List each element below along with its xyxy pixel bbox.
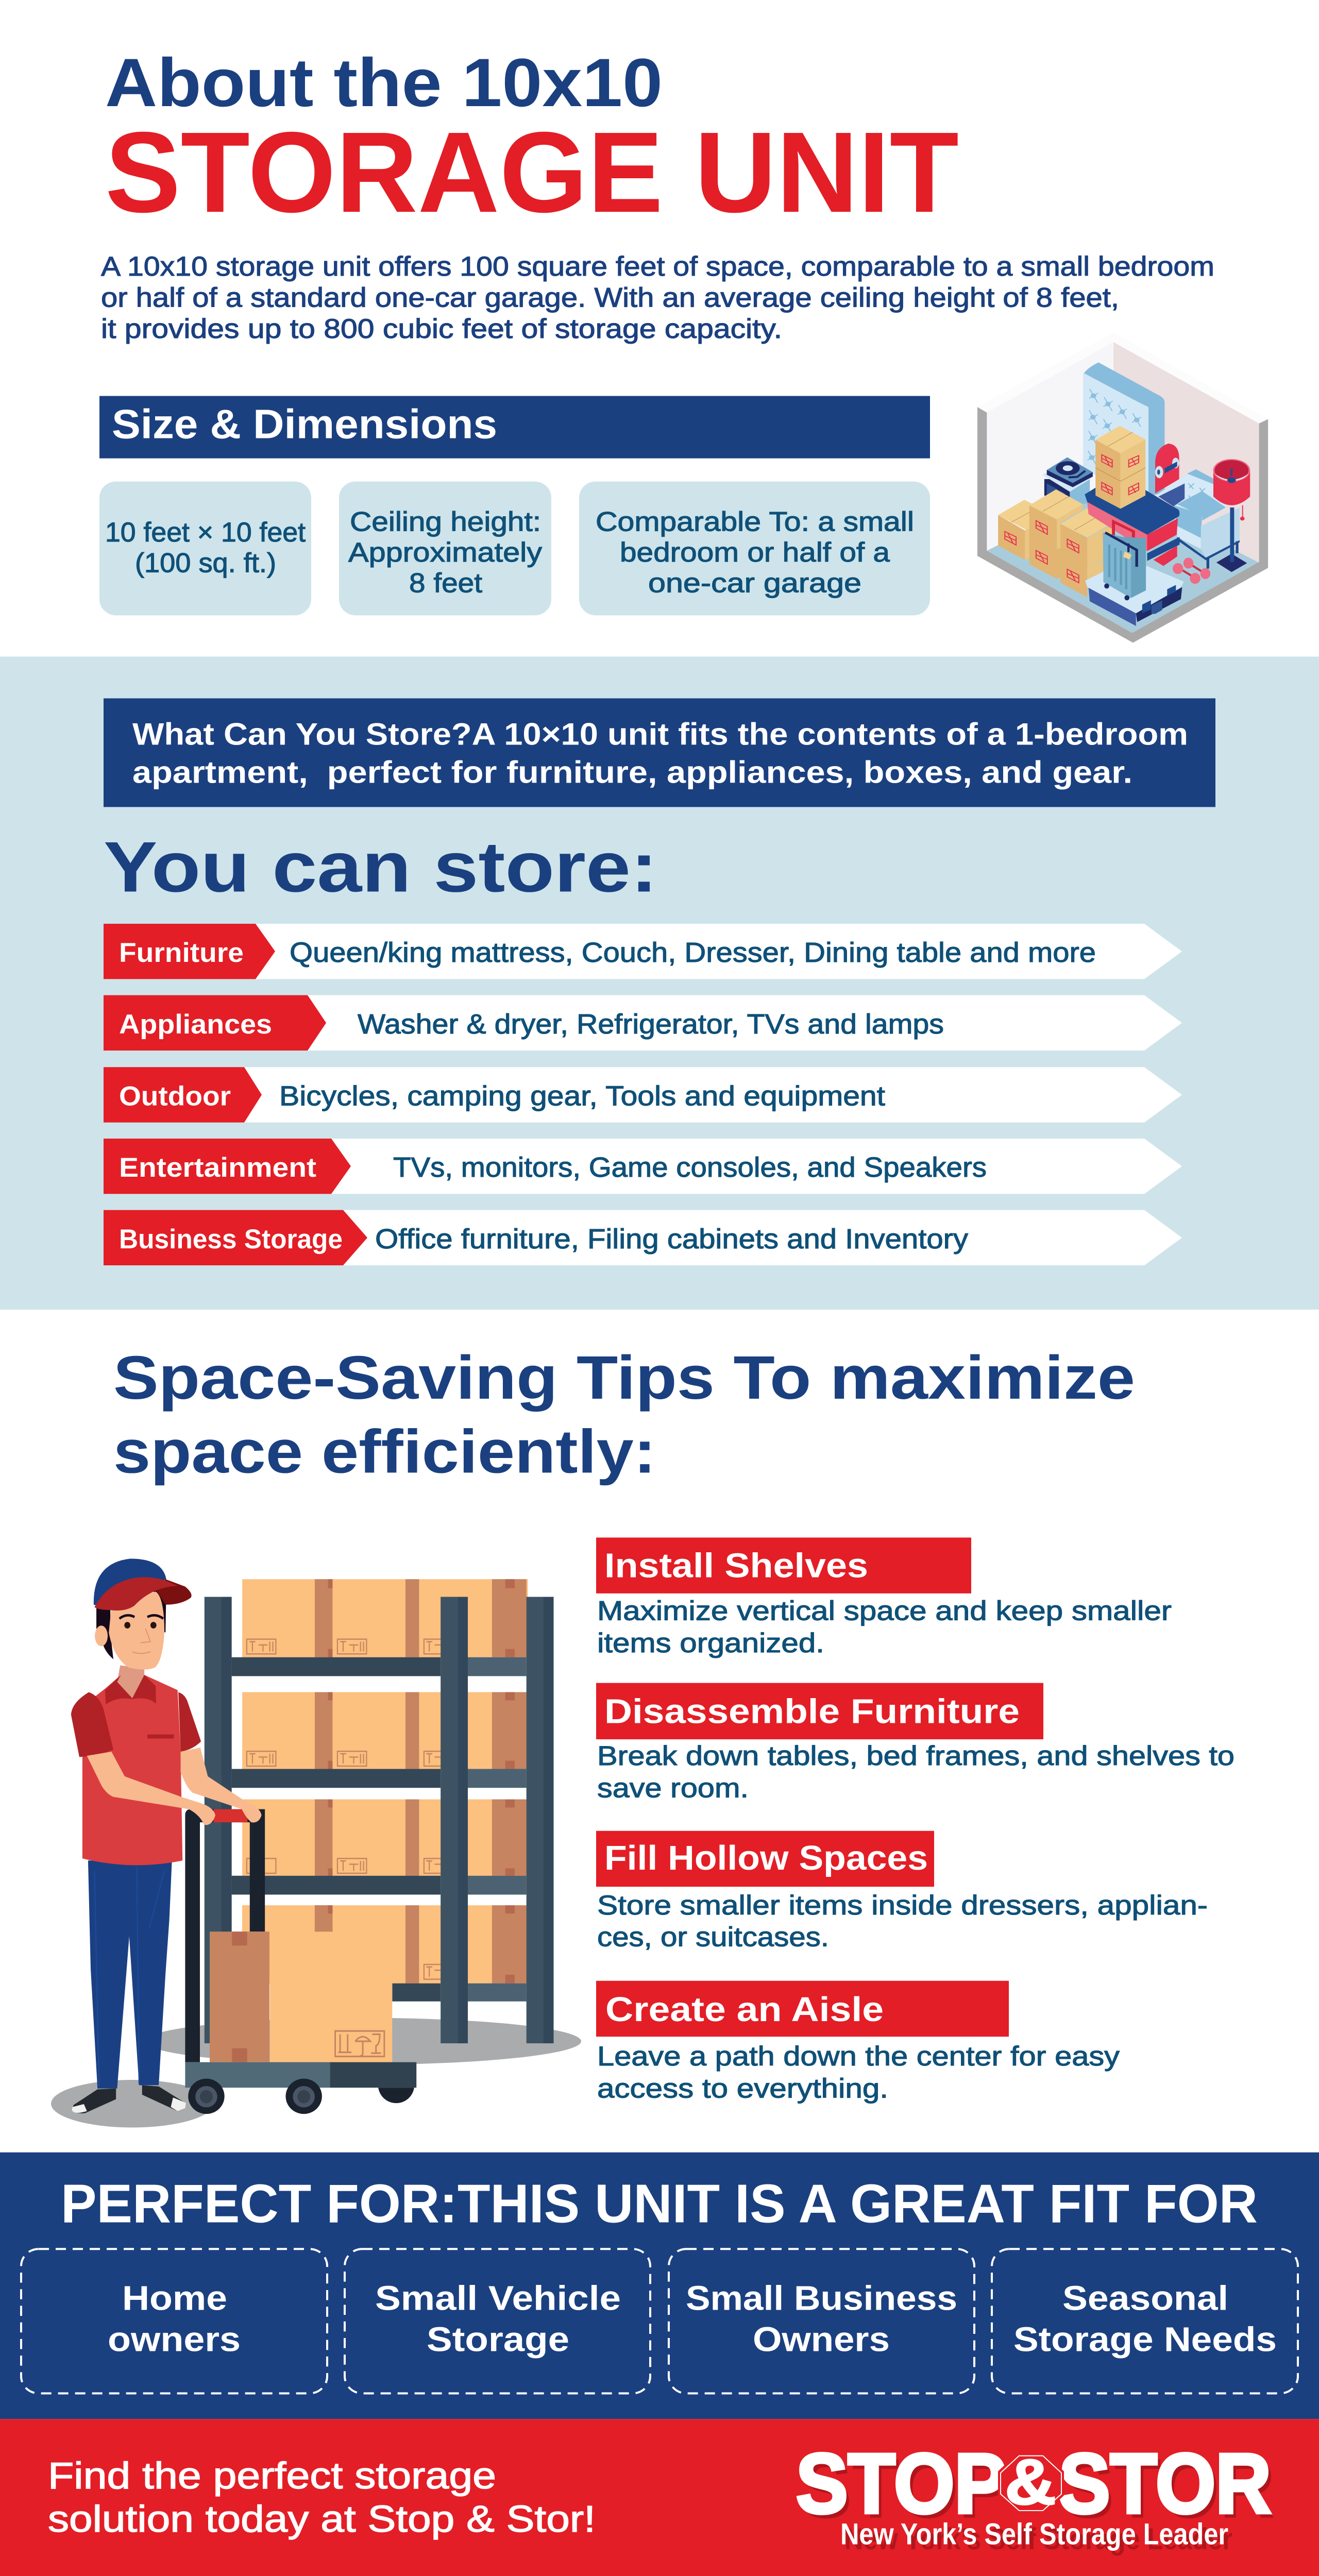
logo: stop and stor: STOP [800, 2442, 1010, 2536]
tip: disassemble furniture: Disassemble Furniture [604, 1692, 1020, 1731]
card: comparable to [579, 482, 930, 615]
card: ceiling height: Approximately [348, 537, 542, 568]
row: appliances: Appliances [119, 1009, 272, 1040]
tip: install shelves: Install Shelves [604, 1547, 868, 1585]
call to action: solution today at Stop & Stor! [48, 2499, 596, 2540]
title [105, 44, 959, 236]
row: business storage: Business Storage [119, 1224, 343, 1255]
panel: size and dimensions heading: Size & Dimensions [112, 401, 497, 447]
intro banner: what can you store: apartment, perfect for furniture, appliances, boxes, and gear. [132, 755, 1132, 789]
tip: disassemble furniture: Break down tables, bed frames, and shelves to [597, 1741, 1235, 1771]
logo: stop and stor: & [1005, 2446, 1056, 2518]
panel: size and dimensions heading [99, 396, 930, 459]
card: small vehicle storage: Storage [427, 2320, 569, 2359]
card: ceiling height [339, 482, 551, 615]
intro paragraph [101, 252, 1214, 344]
illustration: worker with cart and shelves [51, 1558, 581, 2128]
row: entertainment [104, 1139, 1182, 1194]
heading: you can store: You can store: [104, 827, 657, 907]
card: small vehicle storage: Small Vehicle [375, 2279, 621, 2317]
heading: space-saving tips [113, 1343, 1135, 1486]
card: comparable to: Comparable To: a small [596, 507, 914, 537]
card: ceiling height: 8 feet [409, 568, 482, 598]
stacked boxes on table [1095, 426, 1145, 509]
logo: stop and stor: STOR [1059, 2437, 1271, 2531]
card: seasonal storage needs [992, 2249, 1298, 2394]
card: home owners: Home [122, 2279, 227, 2317]
table with bins [1085, 488, 1180, 566]
card: floor size: 10 feet × 10 feet [105, 517, 306, 548]
call to action [48, 2455, 596, 2540]
illustration: isometric storage unit [977, 342, 1269, 643]
row: entertainment: Entertainment [119, 1153, 316, 1183]
row: furniture [104, 924, 1182, 979]
lamp [1213, 459, 1250, 572]
dumbbells [1173, 557, 1210, 584]
row: outdoor: Outdoor [119, 1081, 231, 1111]
row: appliances: Washer & dryer, Refrigerator, TVs and lamps [358, 1008, 944, 1040]
logo: stop and stor: New York’s Self Storage Leader [844, 2522, 1232, 2556]
panel: what can you store [0, 656, 1319, 1310]
tip: fill hollow spaces: Store smaller items inside dressers, applian- [597, 1890, 1208, 1921]
panel: footer [0, 2419, 1319, 2576]
intro banner: what can you store: What Can You Store?A 10×10 unit fits the contents of a 1-bedroom [132, 717, 1188, 751]
card: small business owners [669, 2249, 974, 2394]
call to action: Find the perfect storage [48, 2455, 496, 2497]
card: ceiling height: Ceiling height: [350, 507, 541, 537]
intro paragraph: A 10x10 storage unit offers 100 square feet of space, comparable to a small bedroom [101, 252, 1214, 282]
shelf boxes [242, 1579, 528, 1984]
heading: perfect for: PERFECT FOR:THIS UNIT IS A GREAT FIT FOR [61, 2173, 1258, 2234]
heading: space-saving tips: space efficiently: [113, 1417, 656, 1486]
card: small vehicle storage [345, 2249, 650, 2394]
row: outdoor [104, 1067, 1182, 1123]
tip: create an aisle [596, 1981, 1120, 2104]
title: STORAGE UNIT [105, 108, 959, 236]
logo: stop and stor [796, 2437, 1275, 2556]
card: home owners [21, 2249, 327, 2394]
card: seasonal storage needs: Storage Needs [1013, 2320, 1277, 2359]
logo: stop and stor: STOP [796, 2437, 1006, 2531]
tote and suitcase [1085, 522, 1184, 626]
intro paragraph: or half of a standard one-car garage. With an average ceiling height of 8 feet, [101, 283, 1119, 313]
row: furniture: Furniture [119, 938, 244, 968]
panel: perfect for [0, 2153, 1319, 2419]
tip: create an aisle: Create an Aisle [605, 1991, 884, 2029]
tip: install shelves [596, 1537, 1172, 1658]
tip: disassemble furniture [596, 1683, 1235, 1803]
card: seasonal storage needs: Seasonal [1062, 2279, 1228, 2317]
card: floor size [99, 482, 311, 615]
tip: fill hollow spaces [596, 1831, 1208, 1952]
boxes [998, 489, 1113, 597]
card: comparable to: bedroom or half of a [620, 537, 890, 568]
tip: fill hollow spaces: ces, or suitcases. [597, 1922, 829, 1952]
intro banner: what can you store [104, 698, 1215, 807]
shelf frame [205, 1597, 553, 2043]
chair [1156, 469, 1240, 569]
row: business storage: Office furniture, Filing cabinets and Inventory [375, 1223, 969, 1255]
card: home owners: owners [108, 2320, 241, 2359]
row: appliances [104, 995, 1182, 1050]
logo: stop and stor: STOR [1063, 2442, 1275, 2536]
intro paragraph: it provides up to 800 cubic feet of storage capacity. [101, 314, 782, 344]
worker [71, 1558, 262, 2113]
card: small business owners: Small Business [686, 2279, 957, 2317]
row: outdoor: Bicycles, camping gear, Tools and equipment [279, 1080, 885, 1111]
tip: create an aisle: access to everything. [597, 2074, 888, 2104]
row: furniture: Queen/king mattress, Couch, Dresser, Dining table and more [290, 937, 1096, 968]
heading: space-saving tips: Space-Saving Tips To maximize [113, 1343, 1135, 1412]
card: small business owners: Owners [753, 2320, 890, 2359]
tip: disassemble furniture: save room. [597, 1773, 749, 1803]
tip: create an aisle: Leave a path down the center for easy [597, 2041, 1120, 2072]
row: entertainment: TVs, monitors, Game consoles, and Speakers [393, 1152, 987, 1183]
logo: stop and stor: New York’s Self Storage Leader [840, 2517, 1228, 2551]
cart with boxes [185, 1809, 416, 2114]
tip: fill hollow spaces: Fill Hollow Spaces [604, 1839, 928, 1877]
card: floor size: (100 sq. ft.) [135, 548, 276, 578]
card: comparable to: one-car garage [648, 568, 861, 598]
title: About the 10x10 [105, 44, 663, 121]
tip: install shelves: Maximize vertical space and keep smaller [597, 1596, 1172, 1626]
tip: install shelves: items organized. [597, 1629, 824, 1658]
row: business storage [104, 1210, 1182, 1265]
